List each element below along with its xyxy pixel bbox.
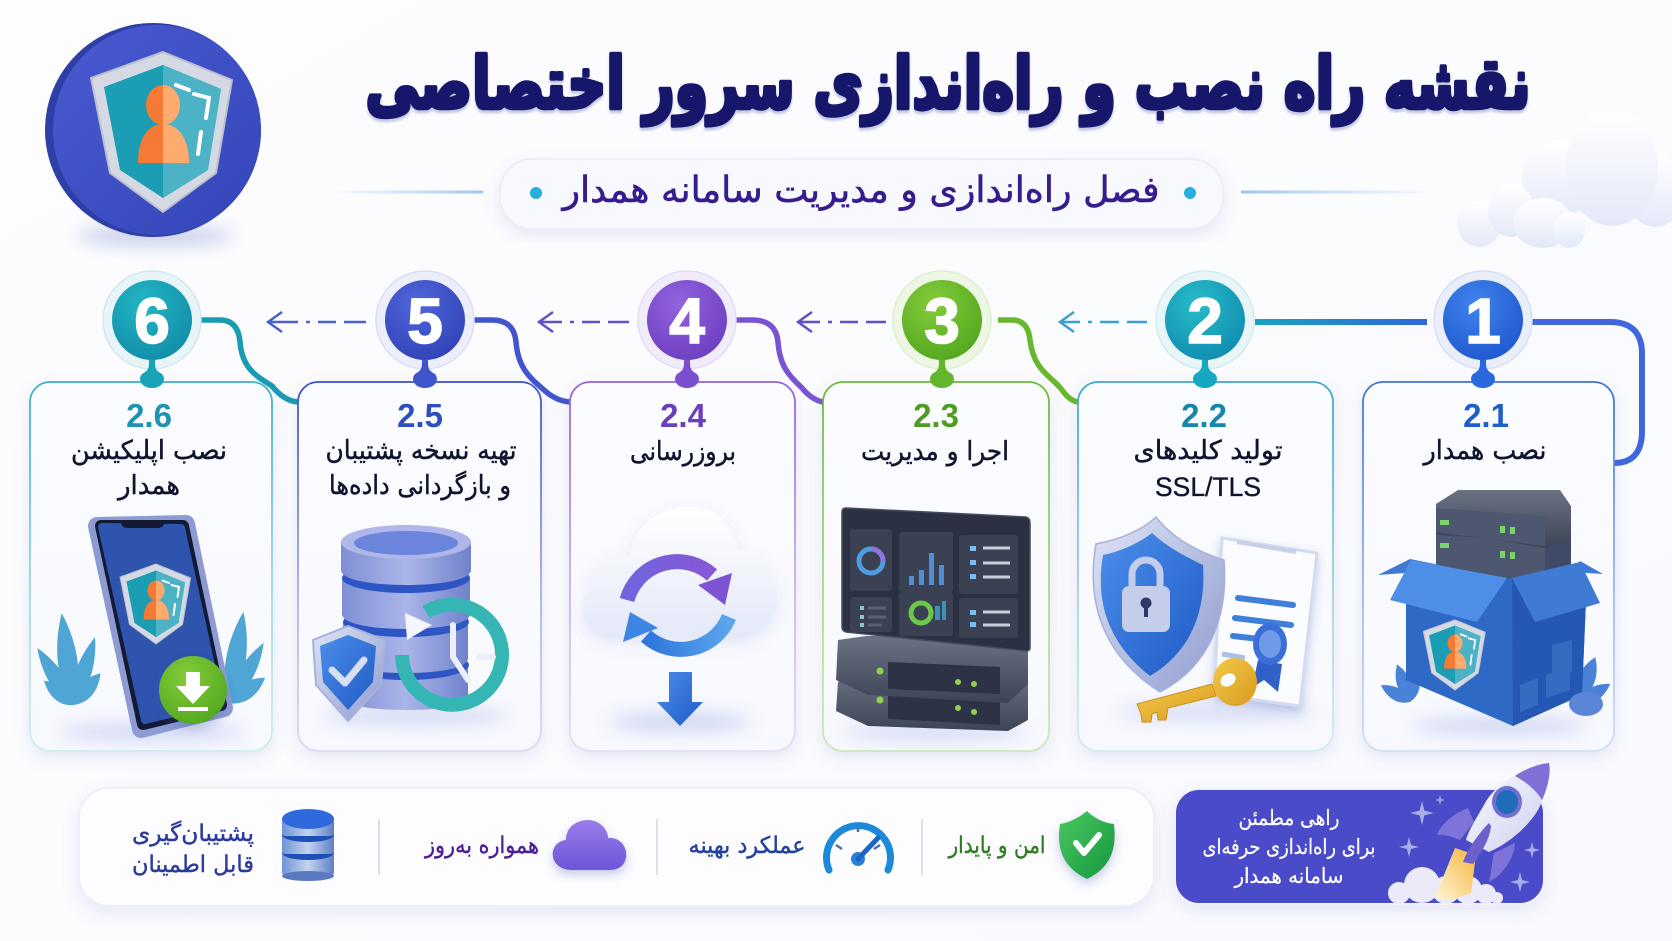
step badge 4: 4 <box>669 285 705 357</box>
feature: reliable backup <box>132 809 334 881</box>
label: عملکرد بهینه <box>688 833 806 859</box>
icon: purple cloud <box>553 820 626 870</box>
card title <box>71 436 227 501</box>
connector: step 1 to 2 <box>1255 319 1427 325</box>
icon: database stack <box>282 809 334 881</box>
card title: اجرا و مدیریت <box>861 437 1009 467</box>
panel: step 1 <box>1363 271 1614 751</box>
icon: cloud sync with download <box>583 507 777 731</box>
decorative line right <box>1241 190 1439 194</box>
step badge 6 <box>103 271 201 388</box>
number: 2.2 <box>1181 397 1227 434</box>
connector: step 3 to card 2 <box>998 320 1078 402</box>
card title: نصب اپلیکیشن <box>71 436 227 466</box>
card title: تولید کلیدهای <box>1134 436 1282 466</box>
card frame <box>298 382 541 751</box>
panel: step 4 <box>570 271 795 751</box>
arrow: dashed 3 to 4 <box>798 312 886 332</box>
icon: green shield <box>1059 811 1115 879</box>
icon: gauge <box>826 825 890 870</box>
subtitle pill: فصل راه‌اندازی و مدیریت سامانه همدار <box>560 170 1160 211</box>
card frame <box>30 382 272 751</box>
banner text: سامانه همدار <box>1234 864 1344 888</box>
arrow: dashed 2 to 3 <box>1060 312 1147 332</box>
card title: و بازگردانی داده‌ها <box>329 470 511 501</box>
number: 2.3 <box>913 397 959 434</box>
card frame <box>1078 382 1333 751</box>
step badge 5 <box>376 271 474 388</box>
panel: step 6 <box>30 271 272 751</box>
panel: step 3 <box>823 271 1049 751</box>
card title: نصب همدار <box>1422 436 1546 466</box>
card title: SSL/TLS <box>1155 472 1261 502</box>
icon: shield, certificate and key <box>1093 517 1317 722</box>
arrow: dashed 4 to 5 <box>539 312 629 332</box>
icon: phone with download <box>31 520 270 741</box>
step badge 2: 2 <box>1187 285 1223 357</box>
step badge 5: 5 <box>407 285 443 357</box>
connector: step 6 to card 5 <box>201 320 298 402</box>
number: 2.5 <box>397 397 443 434</box>
icon: box with servers <box>1378 490 1614 734</box>
icon: server dashboard <box>836 508 1030 740</box>
logo: shield on blue disc <box>45 23 261 245</box>
card frame <box>823 382 1049 751</box>
step badge 6: 6 <box>134 285 170 357</box>
feature: optimal performance <box>688 825 890 870</box>
banner text: برای راه‌اندازی حرفه‌ای <box>1202 835 1376 859</box>
card title: همدار <box>116 471 180 501</box>
panel: feature strip <box>79 788 1154 906</box>
label: پشتیبان‌گیری <box>132 820 254 847</box>
label: همواره به‌روز <box>424 833 539 859</box>
banner text: راهی مطمئن <box>1238 806 1340 830</box>
banner text <box>1202 806 1376 888</box>
card title <box>326 436 516 501</box>
number: 2.1 <box>1463 397 1509 434</box>
label: قابل اطمینان <box>132 852 254 878</box>
panel: step 5 <box>298 271 541 751</box>
card frame <box>570 382 795 751</box>
step badge 1 <box>1434 271 1532 388</box>
label: امن و پایدار <box>948 833 1046 859</box>
decorative line left <box>328 190 483 194</box>
card title <box>1134 436 1282 502</box>
icon: clouds top right <box>1457 110 1672 248</box>
step badge 2 <box>1156 271 1254 388</box>
label <box>132 820 254 878</box>
step badge 1: 1 <box>1465 285 1501 357</box>
card title: تهیه نسخه پشتیبان <box>326 436 516 466</box>
step badge 3: 3 <box>924 285 960 357</box>
connector: step 4 to card 3 <box>734 320 823 402</box>
icon: database with restore clock <box>313 525 510 725</box>
card frame <box>1363 382 1614 751</box>
icon: rocket <box>1388 763 1550 904</box>
connector: step 1 to card <box>1529 322 1642 463</box>
arrow: dashed 5 to 6 <box>268 312 366 332</box>
number: 2.6 <box>126 397 172 434</box>
card title: بروزرسانی <box>630 437 736 467</box>
feature: always updated <box>424 820 626 870</box>
panel: step 2 <box>1078 271 1333 751</box>
number: 2.4 <box>660 397 707 434</box>
step badge 4 <box>638 271 736 388</box>
step badge 3 <box>893 271 991 388</box>
connector: step 5 to card 4 <box>470 320 570 402</box>
subtitle pill <box>328 159 1439 229</box>
feature: secure and stable <box>948 811 1115 879</box>
panel: rocket banner <box>1175 763 1550 904</box>
